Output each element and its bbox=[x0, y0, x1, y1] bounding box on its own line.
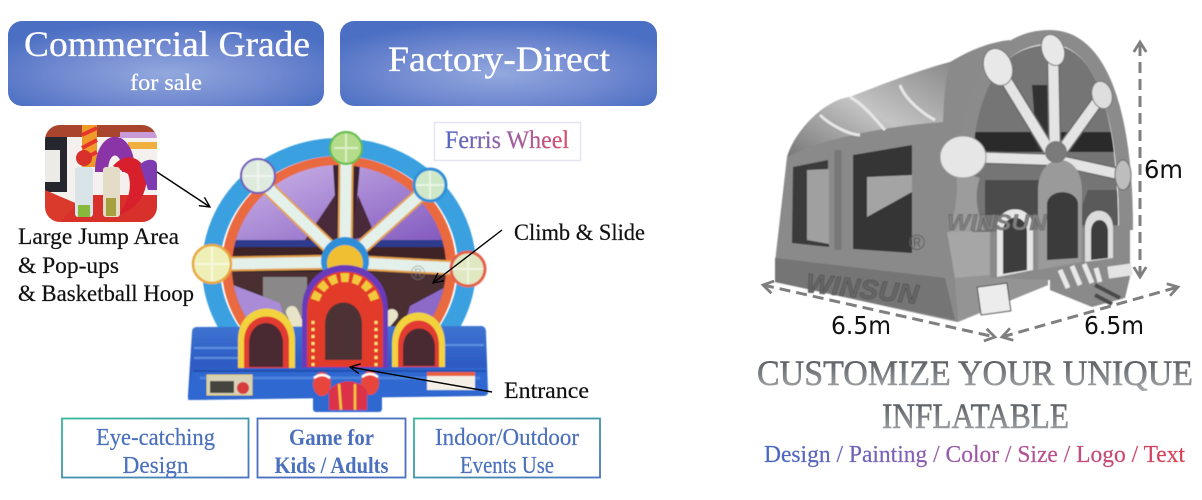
feature box: Eye-catching Design: Eye-catching bbox=[96, 425, 215, 451]
spokes bbox=[225, 165, 455, 325]
dimension arrow: width bbox=[1002, 287, 1178, 337]
dimension arrow: depth bbox=[763, 285, 995, 337]
label: Climb & Slide: Climb & Slide bbox=[514, 220, 645, 245]
button: Commercial Grade for sale: Commercial Grade bbox=[24, 24, 310, 64]
safety signs bbox=[207, 372, 475, 395]
label: Large Jump Area bbox=[18, 224, 194, 306]
subheading: customization options: Design / Painting / Color / Size / Logo / Text bbox=[764, 442, 1185, 468]
entrance slide bbox=[313, 371, 382, 412]
illustration: ferris wheel bounce house bbox=[188, 132, 488, 412]
illustration: grayscale inflatable 3D view bbox=[775, 31, 1133, 322]
gondola balls bbox=[940, 31, 1131, 232]
arrow: climb and slide bbox=[433, 230, 502, 283]
spokes bbox=[963, 50, 1123, 175]
feature box: Indoor/Outdoor Events Use: Indoor/Outdoor bbox=[435, 425, 579, 451]
side wall bbox=[775, 40, 1010, 290]
inflatable base bbox=[188, 326, 488, 400]
label: Entrance: Entrance bbox=[504, 378, 589, 403]
watermark: Winsun logo bbox=[804, 210, 1048, 310]
watermark: ® bbox=[411, 263, 426, 285]
label: Large Jump Area: & Pop-ups bbox=[18, 253, 119, 278]
front wheel bbox=[965, 37, 1126, 232]
front wall bbox=[990, 225, 1130, 280]
feature box: Game for Kids / Adults bbox=[258, 418, 406, 478]
feature box: Eye-catching Design: Design bbox=[122, 453, 188, 479]
heading: Customize your unique inflatable: INFLATABLE bbox=[882, 396, 1069, 436]
entrance step with stripes bbox=[1050, 262, 1130, 307]
label: Large Jump Area: & Basketball Hoop bbox=[18, 281, 194, 306]
dimension labels: 6.5m bbox=[831, 311, 891, 340]
inflatable base bbox=[775, 225, 1130, 322]
arched entrances bbox=[997, 141, 1113, 277]
button: Commercial Grade for sale: for sale bbox=[130, 70, 202, 95]
side arches bbox=[238, 308, 445, 368]
heading: Customize your unique inflatable bbox=[757, 353, 1193, 436]
dimension labels: 6m bbox=[1144, 155, 1183, 184]
feature box: Game for Kids / Adults: Kids / Adults bbox=[274, 453, 389, 478]
button: Commercial Grade for sale bbox=[8, 21, 324, 106]
feature box: Game for Kids / Adults: Game for bbox=[289, 425, 374, 450]
label box: Ferris Wheel: Ferris Wheel bbox=[445, 127, 569, 154]
central arch with hub bbox=[302, 237, 388, 368]
photo: jump area pop-ups and hoop bbox=[45, 125, 157, 222]
feature box: Eye-catching Design bbox=[62, 418, 248, 479]
label box: Ferris Wheel bbox=[434, 122, 580, 160]
watermark: Winsun logo: ® bbox=[909, 230, 925, 255]
wheel gondola balls bbox=[193, 132, 485, 286]
feature box: Indoor/Outdoor Events Use: Events Use bbox=[460, 453, 554, 479]
dimension labels bbox=[831, 155, 1183, 340]
arrow: jump area to castle bbox=[157, 172, 210, 207]
button: Factory-Direct: Factory-Direct bbox=[388, 39, 610, 79]
dimension arrow: height bbox=[1138, 42, 1142, 277]
button: Factory-Direct bbox=[340, 21, 657, 106]
label: Large Jump Area: Large Jump Area bbox=[18, 224, 179, 249]
arrow: entrance bbox=[350, 367, 492, 392]
wheel backdrop bbox=[202, 137, 476, 328]
watermark: Winsun logo: WINSUN bbox=[804, 268, 920, 310]
dimension labels: 6.5m bbox=[1084, 311, 1144, 340]
feature box: Indoor/Outdoor Events Use bbox=[414, 418, 600, 479]
rules sign bbox=[977, 263, 1133, 315]
watermark: Winsun logo: WINSUN bbox=[947, 210, 1048, 235]
